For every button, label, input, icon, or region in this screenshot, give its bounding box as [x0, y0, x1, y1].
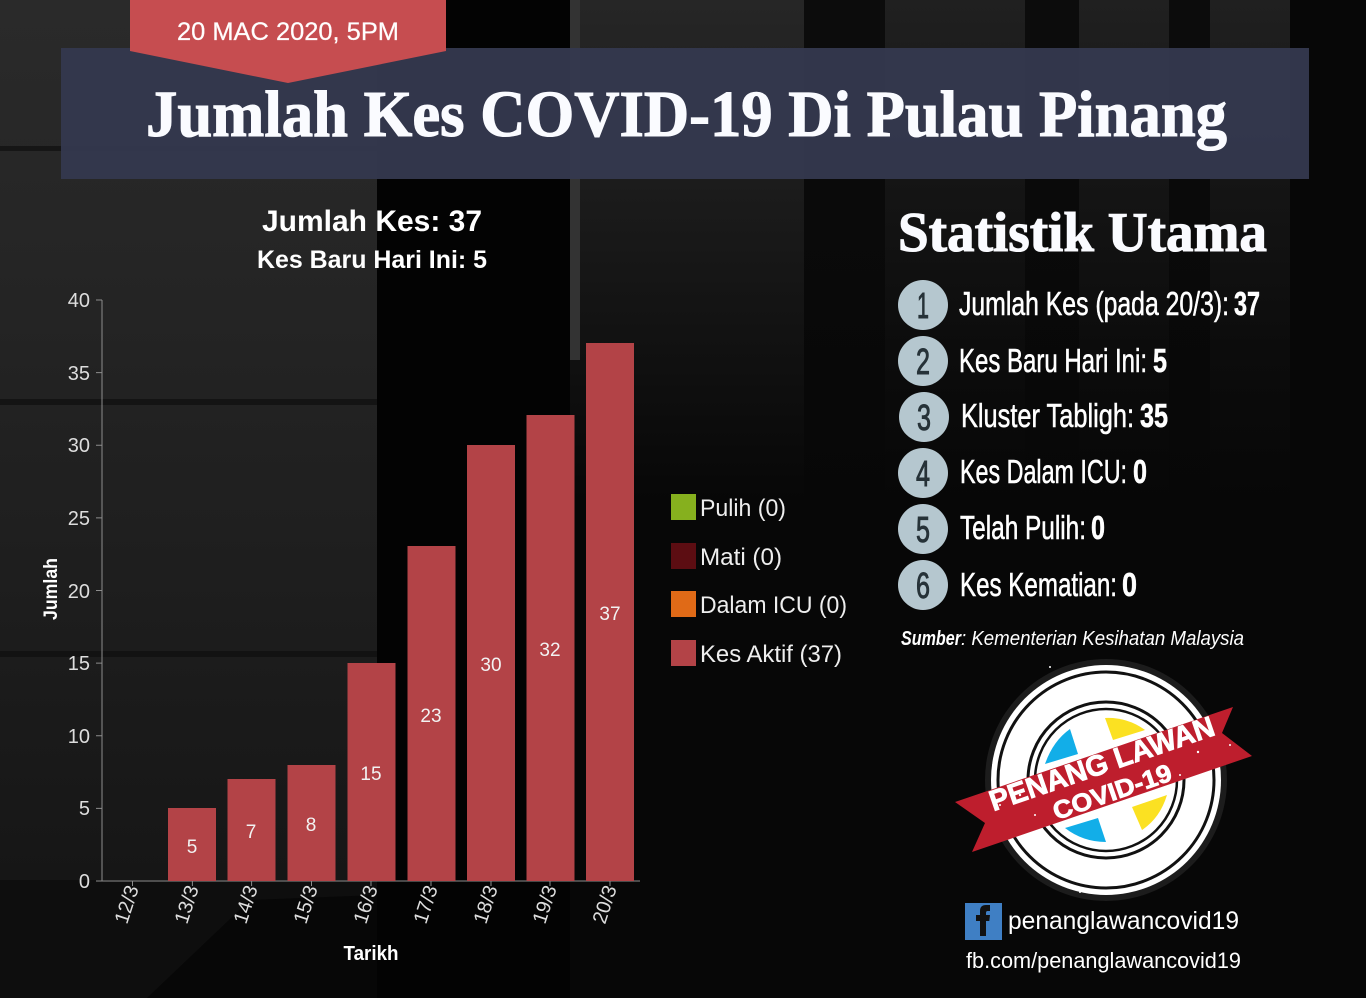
key statistics list: 5: [1153, 342, 1167, 379]
key statistics list: 37: [1234, 285, 1260, 322]
facebook link: [965, 903, 1241, 973]
source note: Sumber: [901, 628, 962, 650]
bar values: 15: [360, 764, 382, 785]
x axis labels: 13/3: [171, 883, 204, 927]
key statistics list: Kluster Tabligh:: [961, 397, 1134, 434]
key statistics list: 0: [1133, 453, 1147, 490]
x axis labels: [111, 883, 622, 927]
bar values: 7: [246, 822, 256, 843]
heading: Statistik Utama: Statistik Utama: [898, 202, 1267, 264]
title banner: [61, 48, 1309, 179]
y axis labels: 5: [79, 798, 90, 820]
key statistics list: Jumlah Kes (pada 20/3):: [959, 285, 1229, 322]
date tag: [130, 0, 446, 83]
x axis labels: 20/3: [589, 883, 622, 927]
x axis labels: 16/3: [350, 883, 383, 927]
y axis labels: 40: [68, 290, 90, 312]
key statistics list: 0: [1122, 566, 1137, 603]
y axis labels: 30: [68, 435, 90, 457]
main title: Jumlah Kes COVID-19 Di Pulau Pinang: [146, 78, 1227, 151]
bar values: [187, 604, 621, 858]
chart heading: Kes Baru Hari Ini: 5: [257, 246, 487, 274]
key statistics list: [898, 280, 1260, 610]
y axis labels: 15: [68, 653, 90, 675]
x axis title: Tarikh: [344, 943, 398, 965]
facebook link: fb.com/penanglawancovid19: [966, 948, 1241, 973]
key statistics list: 0: [1091, 509, 1105, 546]
bar values: 23: [420, 706, 442, 727]
y axis labels: 20: [68, 581, 90, 603]
ribbon: PENANG LAWAN: [985, 711, 1219, 818]
legend: Mati (0): [700, 544, 782, 571]
bars: [168, 343, 634, 881]
ribbon: COVID-19: [1049, 759, 1176, 826]
key statistics list: 3: [917, 397, 931, 438]
key statistics list: 1: [917, 285, 929, 326]
bar values: 8: [306, 815, 316, 836]
x axis labels: 14/3: [230, 883, 263, 927]
key statistics list: Kes Dalam ICU:: [960, 453, 1127, 490]
y axis labels: 25: [68, 508, 90, 530]
colour wedges: [1045, 718, 1167, 842]
y axis labels: 0: [79, 871, 90, 893]
key statistics list: 35: [1140, 397, 1168, 434]
key statistics list: Kes Kematian:: [960, 566, 1117, 603]
chart heading: Jumlah Kes: 37: [262, 205, 482, 238]
bar values: 5: [187, 837, 197, 858]
y axis title: Jumlah: [41, 558, 62, 620]
x axis labels: 18/3: [470, 883, 503, 927]
x axis labels: 15/3: [290, 883, 323, 927]
legend: Pulih (0): [700, 495, 786, 522]
key statistics list: 6: [916, 565, 930, 606]
ribbon: [955, 707, 1252, 852]
bar chart: [41, 290, 640, 965]
y axis labels: 10: [68, 726, 90, 748]
facebook link: penanglawancovid19: [1008, 907, 1239, 935]
bar values: 32: [539, 640, 561, 661]
key statistics list: Telah Pulih:: [960, 509, 1086, 546]
key statistics list: 5: [916, 509, 930, 550]
legend: [671, 494, 847, 668]
speckles: [992, 666, 1231, 893]
key statistics list: 2: [916, 341, 930, 382]
bar values: 37: [599, 604, 621, 625]
chart heading: [257, 205, 487, 274]
date tag: 20 MAC 2020, 5PM: [177, 18, 399, 46]
legend: Dalam ICU (0): [700, 592, 847, 619]
x axis labels: 12/3: [111, 883, 144, 927]
y axis labels: [68, 290, 90, 893]
x axis labels: 17/3: [410, 883, 443, 927]
y axis labels: 35: [68, 363, 90, 385]
key statistics list: Kes Baru Hari Ini:: [959, 342, 1147, 379]
logo: Penang Lawan COVID-19 badge: [955, 659, 1252, 901]
icon: facebook: [965, 903, 1002, 940]
bar values: 30: [480, 655, 502, 676]
key statistics list: 4: [916, 453, 930, 494]
legend: Kes Aktif (37): [700, 641, 842, 668]
source note: : Kementerian Kesihatan Malaysia: [961, 628, 1244, 650]
x axis labels: 19/3: [529, 883, 562, 927]
